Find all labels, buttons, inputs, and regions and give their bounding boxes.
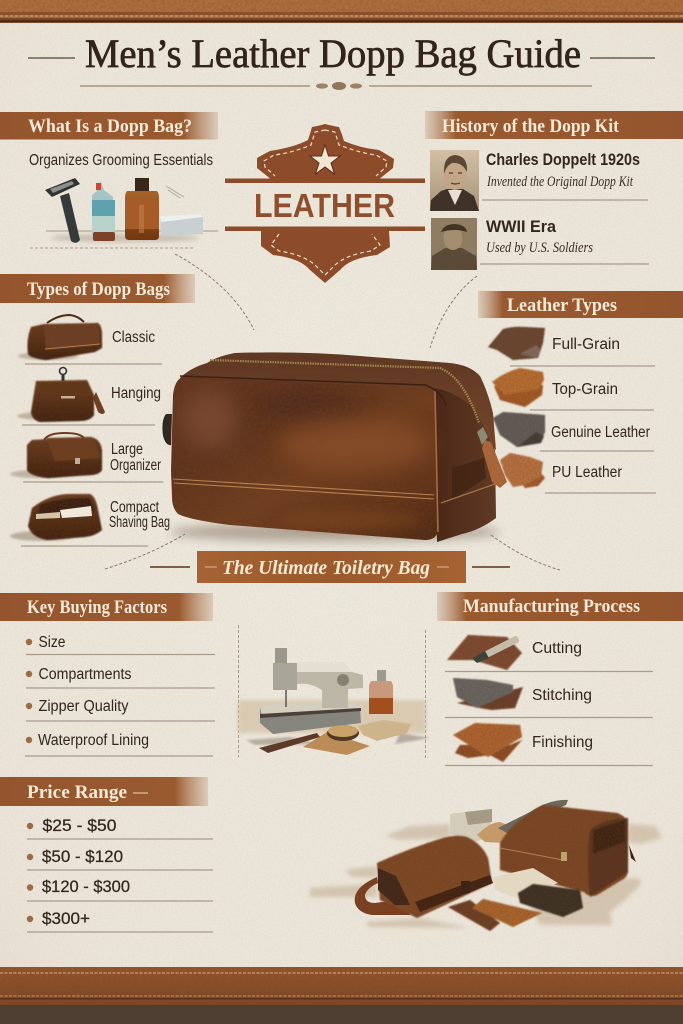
- zipper pull left: [162, 414, 172, 445]
- heading: leather types: Leather Types: [507, 295, 617, 316]
- heading: leather types: [478, 291, 683, 318]
- panel: manufacturing process: [437, 592, 683, 766]
- text: charles doppelt 1920s: Charles Doppelt 1920s: [486, 150, 640, 169]
- top panel: [180, 352, 496, 450]
- text: stitching: Stitching: [532, 687, 592, 704]
- heading: history of the dopp kit: [425, 111, 683, 139]
- illustration: leather bags and accessories: [310, 800, 662, 931]
- panel: types of dopp bags: [0, 274, 195, 546]
- hero: brown leather dopp bag: [162, 352, 507, 542]
- side panel: [435, 388, 496, 542]
- title ornament divider: [80, 82, 592, 90]
- text: classic: Classic: [112, 329, 155, 346]
- dashed rule under grooming icons: [30, 247, 195, 249]
- text: compact shaving bag: Compact: [110, 499, 160, 516]
- bottom dark strip: [0, 1005, 683, 1024]
- title: Men’s Leather Dopp Bag Guide: [85, 31, 581, 76]
- text: finishing: Finishing: [532, 734, 593, 751]
- item: $50 - $120: $50 - $120: [42, 847, 123, 866]
- workshop table wash: [238, 700, 426, 733]
- badge word: leather: LEATHER: [254, 187, 395, 224]
- item: size: [26, 634, 66, 651]
- icon: large organizer bag: [10, 433, 102, 478]
- dashed connector arcs: [105, 254, 560, 570]
- watercolor wash streaks: [310, 824, 662, 928]
- icon: classic bag: [18, 315, 102, 360]
- swatch: full-grain: [488, 327, 545, 360]
- heading: key buying factors: Key Buying Factors: [27, 597, 167, 618]
- text: charles doppelt 1920s: [486, 150, 640, 190]
- cylinder dopp bag with strap: [355, 836, 493, 918]
- panel: what is a dopp bag: [0, 112, 218, 248]
- icon: hanging bag: [17, 368, 105, 422]
- heading: price range: [0, 777, 208, 806]
- badge upper patch: [257, 124, 394, 180]
- heading: manufacturing process: Manufacturing Process: [463, 596, 640, 617]
- folded cloth and grey roll: [493, 868, 583, 917]
- icon: finishing: [453, 723, 522, 762]
- item: $300+: $300+: [42, 909, 90, 928]
- front seam stitching: [173, 479, 434, 499]
- icon: stitching: [453, 678, 523, 710]
- text: organizes grooming essentials: Organizes Grooming Essentials: [29, 152, 213, 169]
- banner: the ultimate toiletry bag: [150, 551, 510, 583]
- heading: types of dopp bags: Types of Dopp Bags: [27, 279, 170, 300]
- item: compartments: Compartments: [38, 666, 132, 683]
- badge lower patch: [261, 231, 390, 283]
- heading: what is a dopp bag: What Is a Dopp Bag?: [28, 116, 192, 137]
- icon: cutting: [447, 635, 522, 670]
- hero ground shadow: [170, 522, 500, 542]
- item: zipper quality: Zipper Quality: [38, 698, 129, 715]
- text: large organizer: Organizer: [110, 457, 161, 474]
- badge bars: [225, 178, 425, 231]
- front panel: [171, 377, 438, 540]
- text: wwii era: [486, 217, 593, 256]
- leather scraps: [259, 720, 411, 755]
- heading: what is a dopp bag: [0, 112, 218, 140]
- hero leather grain: [171, 377, 438, 540]
- cloth and strap on box bag: [477, 800, 568, 843]
- panel: key buying factors: [0, 593, 215, 756]
- icon: grooming essentials: [45, 178, 218, 243]
- panel: leather types: [478, 291, 683, 493]
- glass jar: [450, 809, 492, 842]
- text: compact shaving bag: [109, 499, 170, 531]
- text: genuine leather: Genuine Leather: [551, 424, 650, 441]
- text: hanging: Hanging: [111, 385, 161, 402]
- swatch: top-grain: [492, 368, 544, 407]
- icon: compact shaving bag: [10, 494, 102, 541]
- banner: the ultimate toiletry bag: The Ultimate Toiletry Bag: [222, 557, 430, 579]
- text: charles doppelt 1920s: Invented the Original Dopp Kit: [486, 174, 634, 190]
- zipper pull right: [477, 427, 507, 488]
- text: full-grain: Full-Grain: [552, 336, 620, 353]
- front leather highlight: [280, 419, 430, 471]
- panel: history of the dopp kit: [425, 111, 683, 270]
- text: wwii era: WWII Era: [486, 217, 557, 236]
- illustration: sewing workshop: [238, 625, 430, 758]
- heading: manufacturing process: [437, 592, 683, 621]
- zipper: [210, 360, 479, 423]
- text: cutting: Cutting: [532, 640, 582, 657]
- panel: price range: [0, 777, 213, 932]
- heading: types of dopp bags: [0, 274, 195, 303]
- heading: key buying factors: [0, 593, 213, 621]
- heading: history of the dopp kit: History of the Dopp Kit: [442, 116, 620, 137]
- box dopp bag: [500, 805, 628, 897]
- text: pu leather: PU Leather: [552, 464, 622, 481]
- item: size: Size: [38, 634, 66, 651]
- heading: price range: Price Range: [27, 782, 127, 803]
- item: waterproof lining: Waterproof Lining: [38, 732, 149, 749]
- oil bottle: [369, 670, 393, 714]
- swatch: genuine leather: [493, 412, 545, 447]
- text: top-grain: Top-Grain: [552, 381, 618, 398]
- icon: leather badge: [225, 124, 425, 283]
- text: compact shaving bag: Shaving Bag: [109, 514, 170, 531]
- portrait: charles doppelt: [430, 150, 479, 211]
- item: $120 - $300: $120 - $300: [42, 877, 130, 896]
- leather swatches: [448, 899, 542, 931]
- text: wwii era: Used by U.S. Soldiers: [486, 240, 593, 256]
- text: large organizer: [110, 441, 161, 474]
- bottom leather band: [0, 967, 683, 1005]
- swatch: pu leather: [500, 453, 545, 488]
- text: large organizer: Large: [111, 441, 143, 458]
- box bag details: [500, 845, 636, 862]
- sewing machine: [260, 648, 363, 734]
- item: $25 - $50: $25 - $50: [42, 816, 116, 835]
- top leather band: [0, 0, 683, 23]
- portrait: wwii soldier: [431, 218, 477, 270]
